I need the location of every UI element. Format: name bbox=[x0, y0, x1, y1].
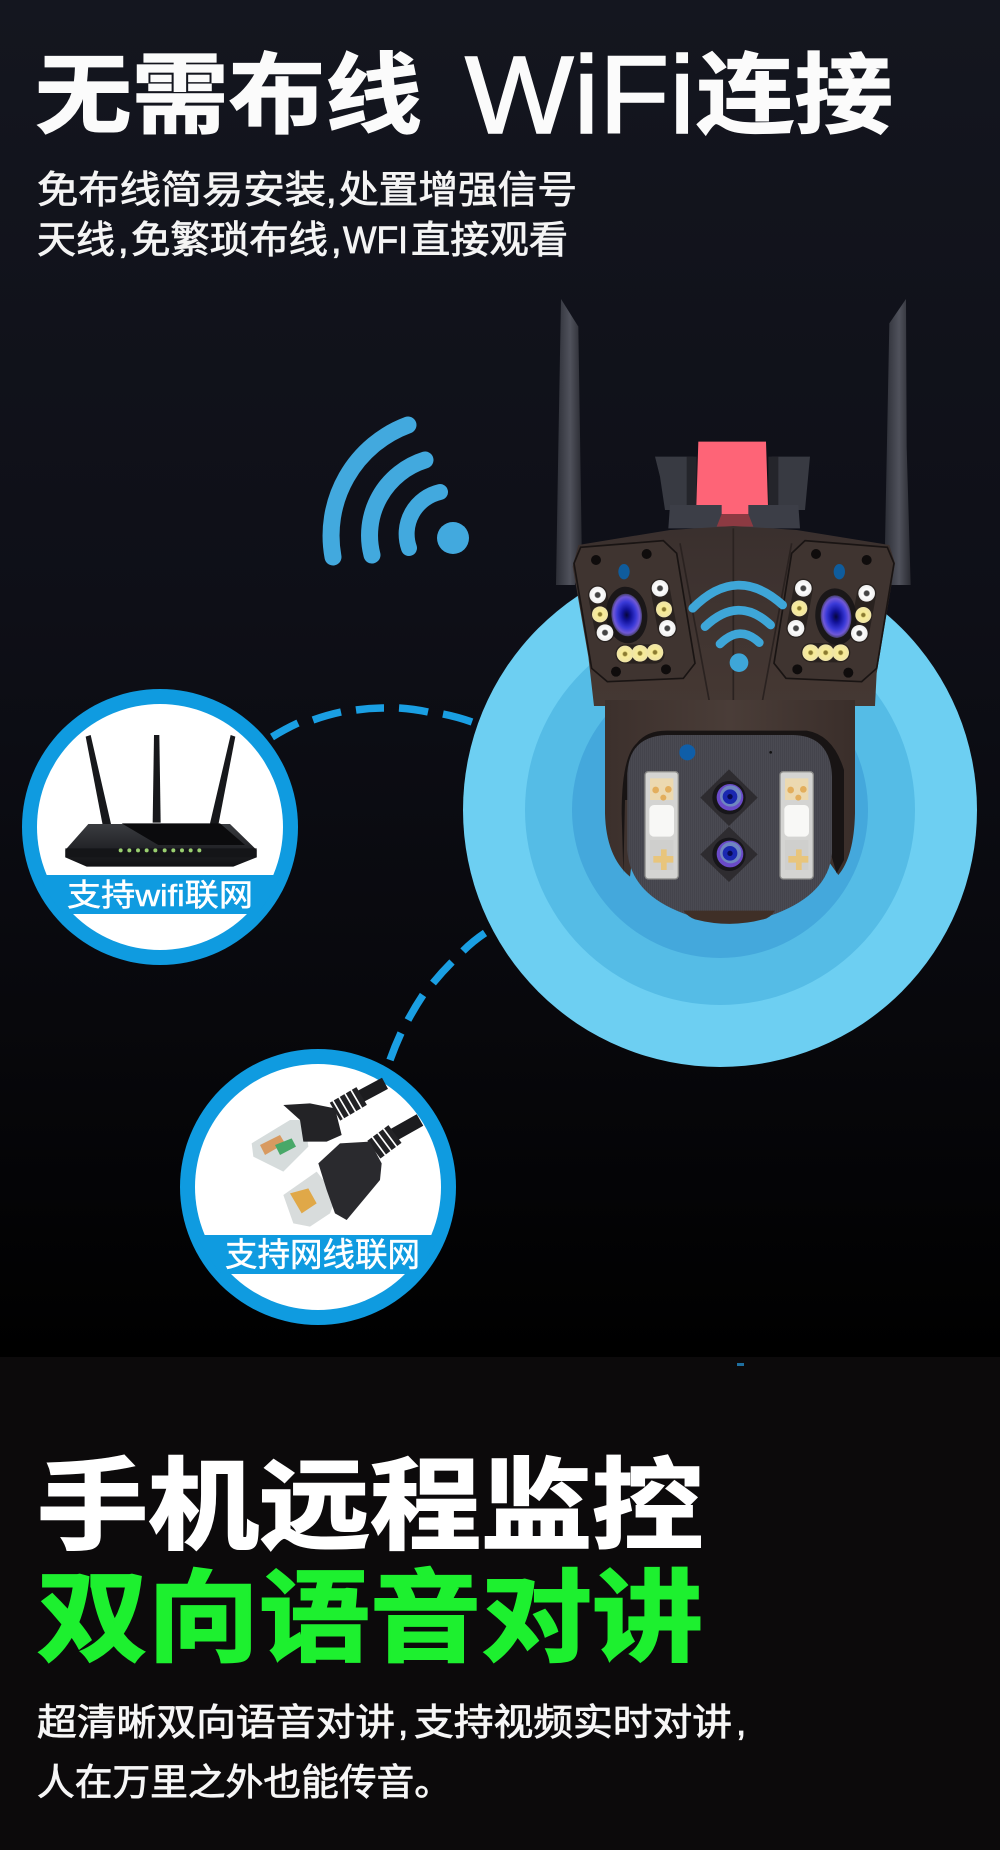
heading: two-way voice intercom: 双向语音对讲 bbox=[37, 1537, 703, 1682]
title: wireless WiFi connection: WiFi bbox=[465, 34, 695, 157]
icon: wifi on camera bbox=[693, 585, 783, 672]
text block: intercom description: 支持视频实时对讲 bbox=[414, 1702, 732, 1743]
lower diamond lens bbox=[700, 827, 758, 882]
title: wireless WiFi connection: 无需布线 bbox=[35, 25, 422, 152]
text block: wiring-free description: , bbox=[331, 220, 342, 262]
dome body bbox=[605, 700, 855, 877]
text block: wiring-free description: , bbox=[118, 220, 129, 262]
text block: wiring-free description: WFI bbox=[343, 220, 408, 262]
camera lower dome bbox=[605, 700, 855, 924]
dashed connector: router to camera bbox=[272, 708, 472, 737]
text block: wiring-free description: 直接观看 bbox=[411, 220, 568, 262]
icon: router bbox=[65, 735, 257, 867]
badge: wifi networking bbox=[22, 689, 298, 965]
icon: large wifi signal bbox=[331, 425, 469, 557]
concentric signal circles bbox=[463, 553, 977, 1067]
right lens panel bbox=[774, 541, 894, 682]
text block: intercom description: 超清晰双向语音对讲 bbox=[37, 1702, 395, 1743]
text block: wiring-free description: 天线 bbox=[37, 220, 115, 262]
stray blue speck bbox=[737, 1363, 744, 1366]
text block: intercom description: 人在万里之外也能传音。 bbox=[37, 1762, 452, 1803]
upper diamond lens bbox=[700, 769, 758, 826]
left lens panel bbox=[574, 541, 695, 682]
icon: network cable bbox=[252, 1083, 420, 1227]
right antenna bbox=[885, 299, 911, 585]
background: upper dark panel bbox=[0, 0, 1000, 1357]
dashed connector: cable to camera bbox=[390, 933, 485, 1060]
text block: intercom description: , bbox=[736, 1702, 746, 1743]
dark rim bbox=[622, 731, 844, 873]
camera upper head bbox=[556, 299, 911, 706]
camera illustration bbox=[556, 299, 911, 924]
title: wireless WiFi connection: 连接 bbox=[696, 25, 893, 152]
title: wireless WiFi connection bbox=[35, 25, 893, 157]
red protective tab bbox=[696, 442, 768, 517]
front plate bbox=[627, 735, 832, 922]
head body bbox=[573, 526, 895, 706]
label: supports ethernet: 支持网线联网 bbox=[225, 1236, 420, 1273]
mounting bracket bbox=[655, 457, 810, 510]
text block: wiring-free description bbox=[37, 170, 577, 262]
bracket base bbox=[668, 505, 800, 528]
background: lower dark panel bbox=[0, 1357, 1000, 1850]
base vent bbox=[683, 911, 775, 924]
text block: intercom description: , bbox=[398, 1702, 408, 1743]
right flood light bbox=[780, 772, 813, 879]
text block: wiring-free description: , bbox=[326, 170, 337, 212]
text block: intercom description bbox=[37, 1702, 746, 1803]
label: supports wifi: 支持wifi联网 bbox=[67, 878, 253, 913]
text block: wiring-free description: 免繁琐布线 bbox=[131, 220, 328, 262]
text block: wiring-free description: 处置增强信号 bbox=[339, 170, 577, 212]
text block: wiring-free description: 免布线简易安装 bbox=[37, 170, 326, 212]
left flood light bbox=[645, 772, 678, 879]
badge: ethernet networking bbox=[180, 1049, 456, 1325]
heading: remote phone monitoring: 手机远程监控 bbox=[37, 1425, 703, 1570]
left antenna bbox=[556, 299, 582, 585]
